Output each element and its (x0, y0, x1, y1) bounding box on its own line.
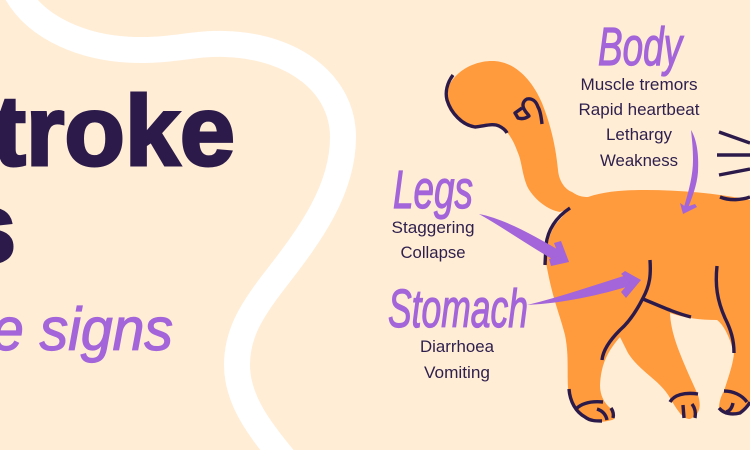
rump line (545, 208, 570, 265)
heading: Legs: Legs (393, 160, 473, 220)
paw 1 (569, 389, 613, 421)
title (0, 75, 235, 283)
whiskers (717, 132, 750, 200)
arrow: to legs (479, 214, 569, 266)
front leg line (716, 266, 734, 353)
body symptoms: Weakness (600, 151, 678, 170)
body symptoms: Lethargy (606, 125, 672, 144)
title line 1: troke (0, 75, 235, 186)
stomach symptoms: Diarrhoea (420, 337, 495, 356)
stomach symptoms: Vomiting (424, 363, 490, 382)
label: legs (392, 160, 474, 262)
body symptoms: Rapid heartbeat (578, 100, 700, 119)
stomach symptoms (420, 337, 495, 382)
heading: Body: Body (598, 17, 684, 77)
tail fur mark (515, 99, 542, 124)
heading: Stomach: Stomach (388, 279, 528, 339)
paw 3 (719, 391, 750, 414)
cat body silhouette (446, 61, 750, 422)
illustration: cat (446, 61, 750, 422)
label: body (578, 17, 700, 170)
paw 2 (670, 393, 698, 418)
arrow: to body (680, 130, 698, 214)
label: stomach (388, 279, 528, 382)
body symptoms: Muscle tremors (580, 75, 698, 94)
leg symptoms: Collapse (400, 243, 466, 262)
hind leg line (602, 260, 650, 360)
white curved ribbon (15, 0, 343, 450)
tail outline (446, 75, 507, 133)
leg symptoms: Staggering (392, 218, 474, 237)
arrow: to stomach (527, 271, 641, 305)
leg symptoms (392, 218, 474, 262)
body symptoms (578, 75, 700, 170)
belly line (643, 299, 691, 317)
